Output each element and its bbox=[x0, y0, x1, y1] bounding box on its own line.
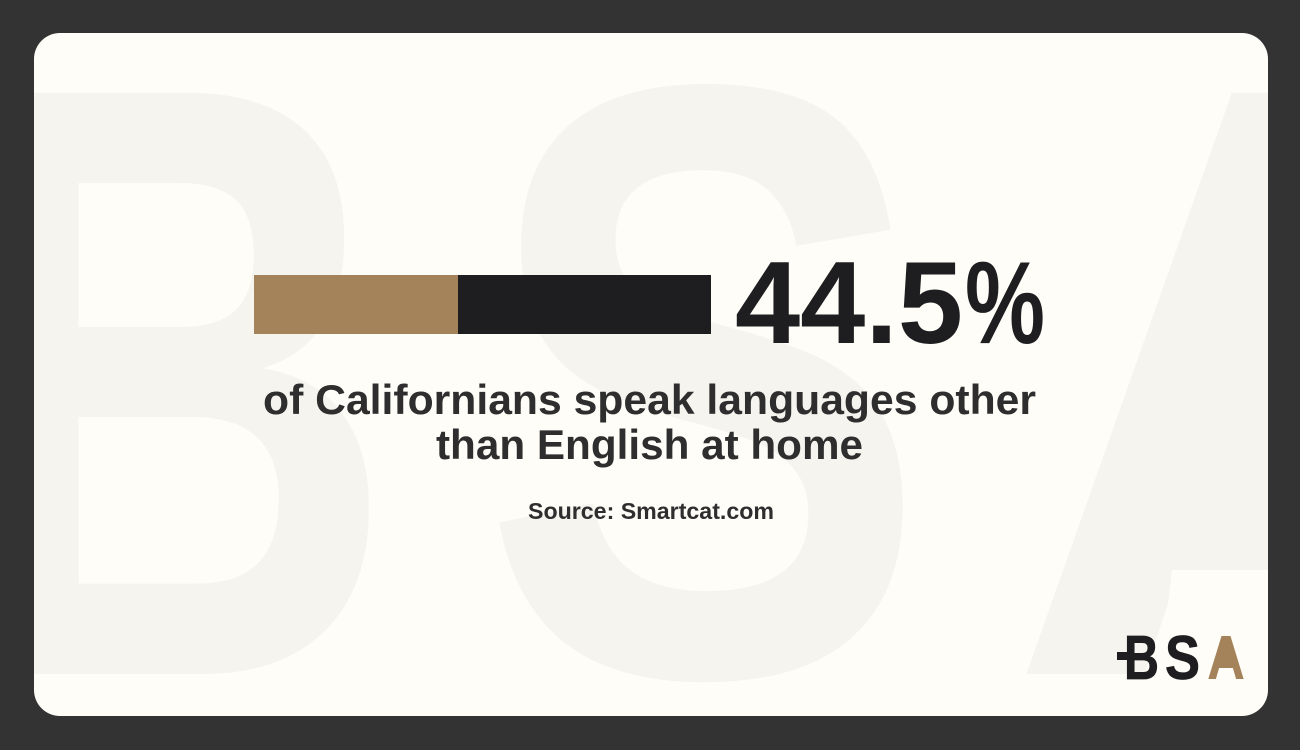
description text: than English at home bbox=[436, 421, 863, 468]
logo: BSA bbox=[1117, 624, 1245, 693]
bar segment: remainder bbox=[458, 275, 711, 334]
statistic: 44.5%: 44.5 bbox=[735, 237, 963, 368]
progress bar bbox=[254, 275, 711, 334]
description text bbox=[263, 376, 1036, 468]
logo letter B: B bbox=[1124, 624, 1159, 693]
watermark A solid fill bbox=[1090, 100, 1268, 575]
watermark A bottom notch bbox=[1155, 570, 1268, 716]
logo letter A: A bbox=[1207, 624, 1245, 693]
logo crossbar bbox=[1117, 652, 1131, 660]
description text: of Californians speak languages other bbox=[263, 376, 1036, 423]
logo A counter fill bbox=[1218, 640, 1234, 666]
statistic: 44.5%: % bbox=[965, 237, 1045, 368]
logo letter S: S bbox=[1165, 624, 1200, 693]
bar segment: filled 44.5% bbox=[254, 275, 458, 334]
source line: Source: Smartcat.com bbox=[528, 498, 774, 524]
